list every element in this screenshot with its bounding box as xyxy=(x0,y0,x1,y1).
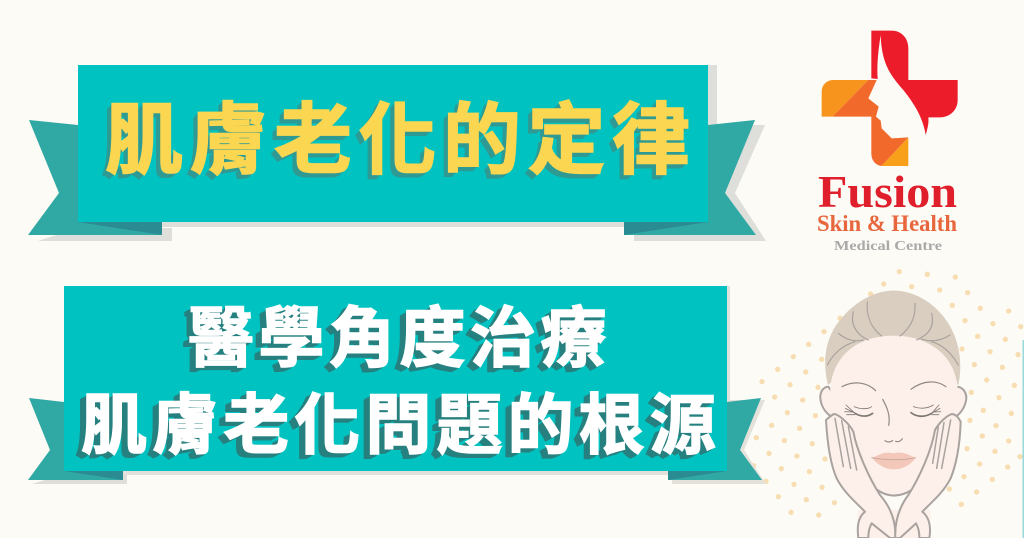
face skin xyxy=(830,336,958,495)
neck xyxy=(857,510,931,538)
closed eyes xyxy=(845,405,941,416)
jaw and chin shading xyxy=(877,490,912,495)
logo: medical cross with face xyxy=(822,31,958,166)
left hand xyxy=(826,414,895,538)
hair xyxy=(825,291,960,385)
heading: bottom banner line 2: 肌膚老化問題的根源 xyxy=(81,388,721,462)
lips xyxy=(872,453,916,469)
ribbon: top banner xyxy=(28,65,766,241)
heading: top banner: 肌膚老化的定律 xyxy=(105,96,697,184)
ears xyxy=(820,387,966,417)
logo wordmark: Fusion xyxy=(818,166,957,217)
eyebrows and nose xyxy=(842,382,946,442)
ribbon: bottom banner xyxy=(28,286,766,484)
dotted halo behind face xyxy=(751,269,1023,518)
finger lines xyxy=(835,418,951,470)
right hand xyxy=(895,414,961,538)
logo wordmark xyxy=(817,166,957,254)
heading: bottom banner line 1: 醫學角度治療 xyxy=(188,301,611,375)
hair strands xyxy=(827,302,958,365)
right edge strip xyxy=(1022,340,1024,538)
illustration: woman's face with hands xyxy=(820,291,966,538)
logo wordmark: Skin & Health xyxy=(817,211,957,236)
logo wordmark: Medical Centre xyxy=(834,239,942,254)
